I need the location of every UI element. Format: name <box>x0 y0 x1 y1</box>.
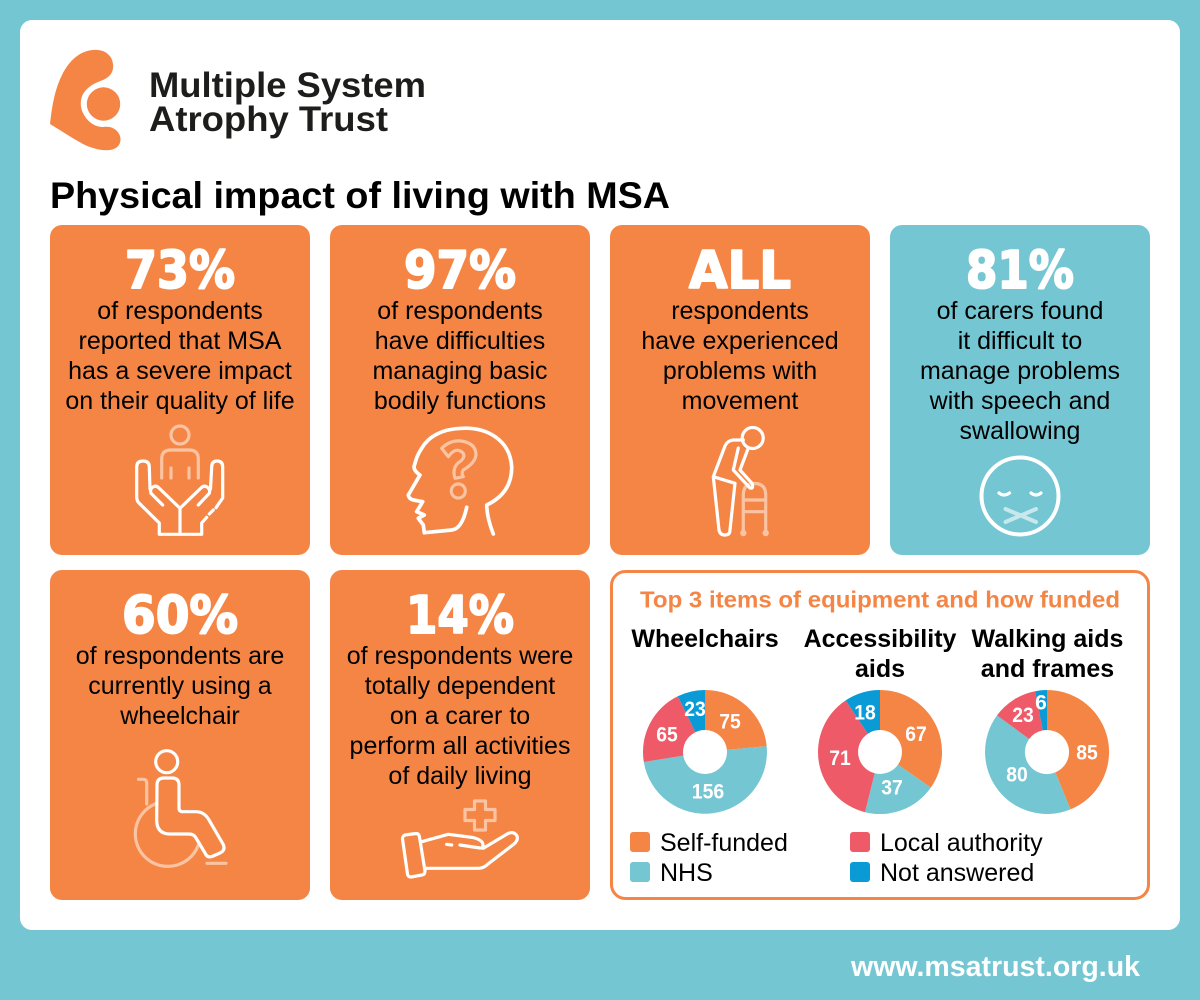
panel: 97% bodily functions: 97% <box>404 241 516 301</box>
donut chart: accessibility aids: Accessibility <box>804 625 957 653</box>
panel: ALL movement <box>610 225 870 555</box>
panel: 14% dependent on a carer <box>330 570 590 900</box>
donut chart: wheelchairs: 156 <box>692 780 724 804</box>
panel: 73% quality of life: has a severe impact <box>68 357 292 385</box>
donut chart: accessibility aids: 37 <box>881 776 903 800</box>
donut chart: walking aids and frames <box>972 625 1123 814</box>
donut chart: wheelchairs: 65 <box>656 724 678 746</box>
panel: 60% wheelchair: currently using a <box>88 672 272 700</box>
panel: 14% dependent on a carer: of daily living <box>388 762 532 790</box>
panel: 81% carers: it difficult to <box>958 327 1082 355</box>
panel: 14% dependent on a carer: totally dependent <box>365 672 555 700</box>
legend: Local authority <box>880 829 1043 857</box>
panel: 81% carers: 81% <box>966 241 1074 301</box>
panel: 73% quality of life: reported that MSA <box>79 327 282 355</box>
panel: 60% wheelchair: wheelchair <box>119 702 240 730</box>
panel: 60% wheelchair <box>50 570 310 900</box>
panel: 81% carers: of carers found <box>937 297 1103 325</box>
icon: hands holding person <box>137 426 223 534</box>
donut chart: wheelchairs: Wheelchairs <box>631 625 779 653</box>
donut chart: wheelchairs: 23 <box>684 698 706 721</box>
donut chart: accessibility aids <box>804 625 957 814</box>
donut chart: accessibility aids: 71 <box>829 747 851 770</box>
panel: ALL movement: movement <box>682 387 798 415</box>
donut chart: walking aids and frames: 23 <box>1012 704 1034 727</box>
panel: ALL movement: respondents <box>671 297 809 325</box>
panel: 81% carers: swallowing <box>960 417 1080 445</box>
panel: equipment and funding <box>612 572 1148 898</box>
panel: 73% quality of life <box>50 225 310 555</box>
logo: Multiple System Atrophy Trust: Atrophy Trust <box>149 100 388 139</box>
title: Physical impact of living with MSA <box>50 175 670 216</box>
donut chart: wheelchairs: 75 <box>719 710 741 734</box>
icon: face with taped mouth <box>982 458 1058 534</box>
panel: 14% dependent on a carer: on a carer to <box>390 702 530 730</box>
donut chart: walking aids and frames: 80 <box>1006 764 1028 786</box>
panel: 97% bodily functions: managing basic <box>372 357 548 385</box>
panel: 81% carers: manage problems <box>920 357 1120 385</box>
donut chart: walking aids and frames: Walking aids <box>972 625 1123 653</box>
legend <box>630 829 1043 887</box>
panel: 97% bodily functions: have difficulties <box>375 327 545 355</box>
donut chart: accessibility aids: 67 <box>905 723 927 746</box>
logo: Multiple System Atrophy Trust: Multiple System <box>149 66 426 105</box>
panel: 97% bodily functions: bodily functions <box>374 387 546 415</box>
panel: ALL movement: problems with <box>663 357 817 385</box>
icon: wheelchair user <box>135 751 226 866</box>
icon: head with question mark <box>408 428 512 534</box>
legend: Self-funded <box>660 829 788 857</box>
icon: person with walking frame <box>713 428 769 536</box>
panel: 73% quality of life: of respondents <box>97 297 263 325</box>
panel: 73% quality of life: on their quality of life <box>65 387 295 415</box>
icon: hand with medical cross <box>402 801 517 877</box>
donut chart: accessibility aids: aids <box>855 655 905 683</box>
donut chart: walking aids and frames: 85 <box>1076 742 1098 764</box>
panel: 97% bodily functions: of respondents <box>377 297 543 325</box>
legend: NHS <box>660 859 713 887</box>
panel: ALL movement: have experienced <box>641 327 839 355</box>
panel: 73% quality of life: 73% <box>125 241 235 301</box>
logo: Multiple System Atrophy Trust <box>50 50 426 150</box>
panel: ALL movement: ALL <box>689 241 791 301</box>
heading: top 3 items: Top 3 items of equipment and how funded <box>640 586 1120 612</box>
footer website: www.msatrust.org.uk <box>850 951 1141 983</box>
panel: 81% carers: with speech and <box>929 387 1110 415</box>
donut chart: walking aids and frames: and frames <box>981 655 1114 683</box>
legend: Not answered <box>880 859 1034 887</box>
panel: 60% wheelchair: 60% <box>122 586 238 646</box>
panel: 14% dependent on a carer: perform all activities <box>350 732 570 760</box>
donut chart: walking aids and frames: 6 <box>1035 692 1047 714</box>
panel: 14% dependent on a carer: of respondents were <box>347 642 573 670</box>
panel: 60% wheelchair: of respondents are <box>76 642 284 670</box>
donut chart: wheelchairs <box>631 625 779 814</box>
panel: 97% bodily functions <box>330 225 590 555</box>
panel: 14% dependent on a carer: 14% <box>406 586 514 646</box>
panel: 81% carers <box>890 225 1150 555</box>
donut chart: accessibility aids: 18 <box>854 702 876 724</box>
